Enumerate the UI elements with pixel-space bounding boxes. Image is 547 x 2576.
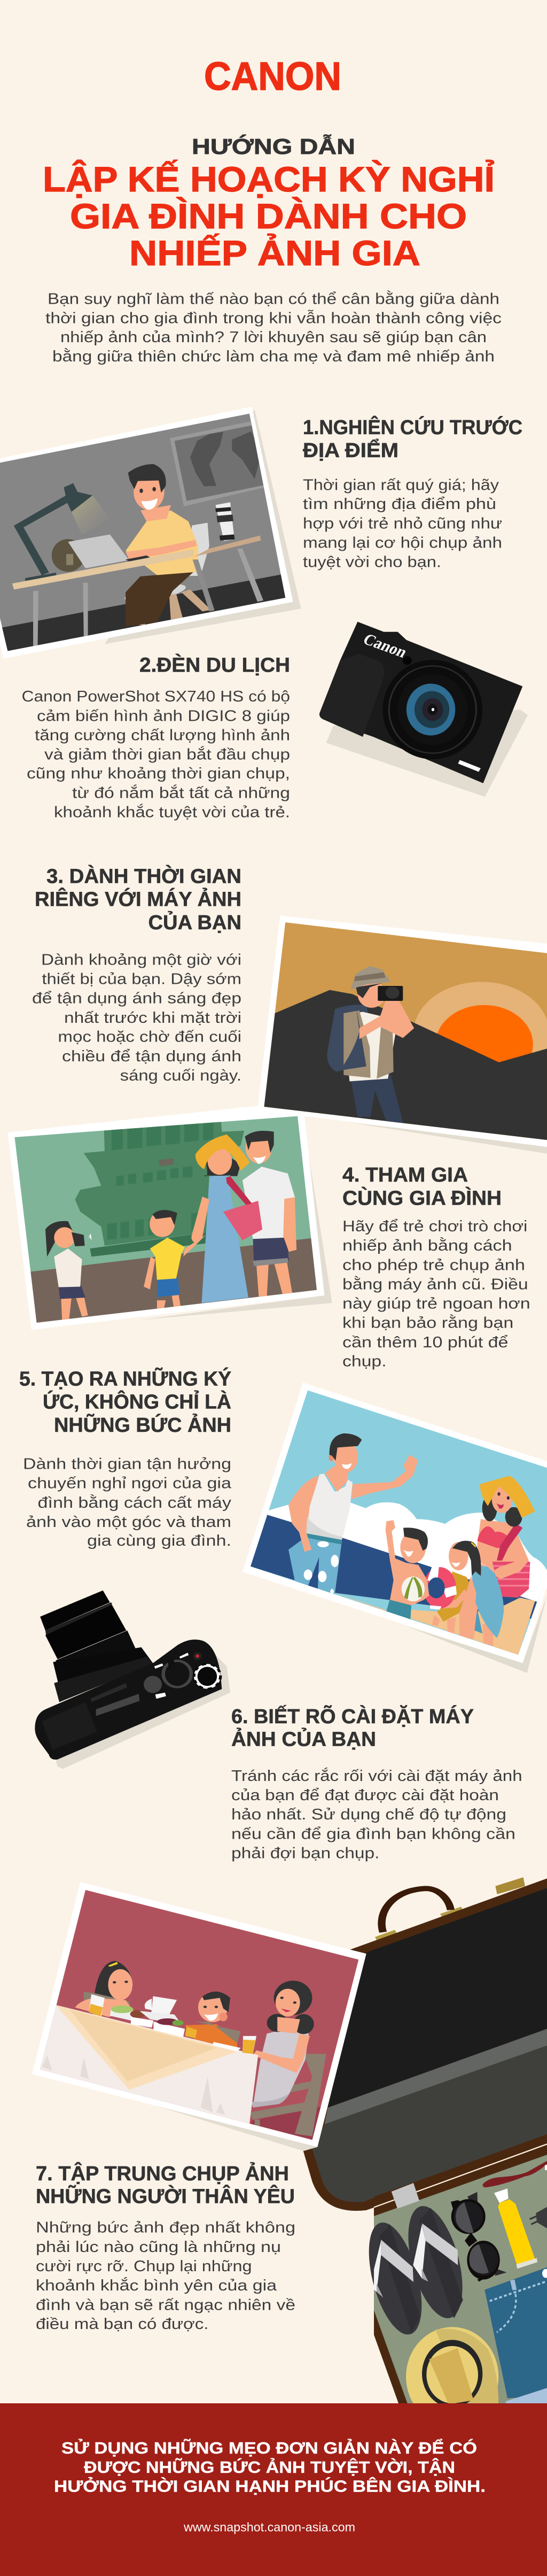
intro text: Bạn suy nghĩ làm thế nào bạn có thể cân bằng giữa dành	[48, 290, 499, 308]
body 3: sáng cuối ngày.	[120, 1067, 241, 1084]
body 6	[231, 1767, 522, 1862]
heading 2: 2.ĐÈN DU LỊCH	[139, 653, 290, 677]
suitcase contents	[358, 2134, 547, 2426]
body 3	[32, 952, 241, 1084]
body 4: Hãy để trẻ chơi trò chơi	[342, 1218, 527, 1235]
sunglasses	[467, 2192, 478, 2202]
body 6: nếu cần để gia đình bạn không cần	[231, 1825, 515, 1842]
woman	[204, 1158, 239, 1176]
heading 5: 5. TẠO RA NHỮNG KÝ	[19, 1367, 231, 1391]
body 7	[36, 2219, 295, 2333]
heading 4	[342, 1164, 502, 1209]
body 3: để tận dụng ánh sáng đẹp	[32, 990, 241, 1007]
body 7: điều mà bạn có được.	[36, 2316, 208, 2333]
footer message: SỬ DỤNG NHỮNG MẸO ĐƠN GIẢN NÀY ĐỂ CÓ	[61, 2438, 477, 2457]
body 3: mọc hoặc chờ đến cuối	[58, 1029, 241, 1046]
body 4: bằng máy ảnh cũ. Điều	[342, 1276, 528, 1293]
section 7 text	[36, 2162, 295, 2333]
body 4	[342, 1218, 530, 1370]
heading 3: 3. DÀNH THỜI GIAN	[46, 865, 241, 888]
section 2 text	[21, 653, 290, 821]
girl	[432, 1615, 440, 1626]
title	[43, 159, 495, 273]
heading 6	[231, 1705, 474, 1751]
suitcase lid	[302, 1877, 547, 2211]
woman	[253, 2027, 309, 2107]
heading 3: CỦA BẠN	[149, 911, 241, 934]
heading 7	[36, 2162, 295, 2208]
title: NHIẾP ẢNH GIA	[129, 233, 420, 273]
intro text: thời gian cho gia đình trong khi vẫn hoàn thành công việc	[45, 309, 502, 327]
body 4: cần thêm 10 phút để	[342, 1334, 509, 1351]
body 1: Thời gian rất quý giá; hãy	[303, 476, 499, 493]
body 2: và giảm thời gian bắt đầu chụp	[44, 745, 290, 763]
heading 7: 7. TẬP TRUNG CHỤP ẢNH	[36, 2162, 289, 2185]
title: GIA ĐÌNH DÀNH CHO	[70, 196, 467, 236]
heading 1: 1.NGHIÊN CỨU TRƯỚC	[303, 415, 522, 439]
body 2: Canon PowerShot SX740 HS có bộ	[21, 688, 290, 705]
heading 1	[303, 415, 522, 462]
sunscreen tube	[494, 2188, 509, 2203]
subtitle: HƯỚNG DẪN	[192, 134, 355, 159]
footer background	[0, 2403, 547, 2576]
footer message: HƯỞNG THỜI GIAN HẠNH PHÚC BÊN GIA ĐÌNH.	[54, 2476, 486, 2495]
footer panel	[0, 2403, 547, 2576]
heading 5: NHỮNG BỨC ẢNH	[54, 1413, 231, 1437]
body 5: gia cùng gia đình.	[87, 1532, 231, 1549]
body 5: đình bằng cách cất máy	[37, 1494, 232, 1511]
body 7: cười rực rỡ. Chụp lại những	[36, 2258, 252, 2275]
body 1: tìm những địa điểm phù	[303, 496, 496, 513]
table	[40, 2005, 258, 2124]
intro text	[45, 290, 502, 365]
hat	[406, 2327, 498, 2426]
heading 5	[19, 1367, 231, 1437]
header	[43, 54, 502, 365]
illustration: photo of family at temple	[0, 1101, 332, 1330]
section 6 text	[231, 1705, 522, 1862]
website url: www.snapshot.canon-asia.com	[183, 2520, 355, 2534]
illustration: photo of photographer at sunset	[257, 916, 547, 1154]
illustration: open suitcase	[302, 1877, 547, 2426]
body 2: cũng như khoảng thời gian chụp,	[27, 765, 290, 782]
body 5: ảnh vào một góc và tham	[26, 1514, 231, 1531]
body 2: từ đó nắm bắt tất cả những	[72, 784, 290, 801]
icon: Canon camera top view	[35, 1591, 230, 1769]
body 2: khoảnh khắc tuyệt vời của trẻ.	[54, 804, 290, 821]
title: LẬP KẾ HOẠCH KỲ NGHỈ	[43, 159, 495, 199]
body 2: cảm biến hình ảnh DIGIC 8 giúp	[37, 708, 290, 725]
body 7: đình và bạn sẽ rất ngạc nhiên về	[36, 2296, 295, 2313]
icon: Canon compact camera front	[319, 622, 528, 797]
body 3: thiết bị của bạn. Dậy sớm	[42, 970, 241, 988]
body 1	[303, 476, 502, 570]
heading 5: ỨC, KHÔNG CHỈ LÀ	[43, 1390, 231, 1414]
intro text: nhiếp ảnh của mình? 7 lời khuyên sau sẽ giúp bạn cân	[60, 329, 487, 346]
heading 6: 6. BIẾT RÕ CÀI ĐẶT MÁY	[231, 1705, 474, 1728]
heading 4: CÙNG GIA ĐÌNH	[342, 1186, 502, 1209]
body 1: mang lại cơ hội chụp ảnh	[303, 535, 502, 552]
illustration: photo of family at beach	[243, 1379, 547, 1673]
body 7: khoảnh khắc bình yên của gia	[36, 2277, 277, 2294]
body 6: của bạn để đạt được cài đặt hoàn	[231, 1787, 499, 1804]
section 1 text	[303, 415, 522, 570]
heading 1: ĐỊA ĐIỂM	[303, 438, 398, 462]
body 2: tăng cường chất lượng hình ảnh	[35, 727, 290, 744]
body 5: chuyến nghỉ ngơi của gia	[28, 1475, 232, 1492]
footer message	[54, 2438, 486, 2495]
girl	[94, 1961, 132, 1999]
heading 3: RIÊNG VỚI MÁY ẢNH	[35, 888, 241, 911]
heading 7: NHỮNG NGƯỜI THÂN YÊU	[36, 2185, 295, 2208]
body 4: khi bạn bảo rằng bạn	[342, 1314, 513, 1332]
section 5 text	[19, 1367, 232, 1549]
heading 4: 4. THAM GIA	[342, 1164, 468, 1186]
man	[288, 1537, 342, 1594]
charger	[536, 2207, 547, 2228]
boy	[386, 1599, 411, 1619]
body 5: Dành thời gian tận hưởng	[23, 1455, 231, 1472]
section 4 text	[342, 1164, 530, 1370]
body 6: phải đợi bạn chụp.	[231, 1845, 379, 1862]
flip flops	[358, 2215, 432, 2342]
body 6: Tránh các rắc rối với cài đặt máy ảnh	[231, 1767, 522, 1785]
body 4: cho phép trẻ chụp ảnh	[342, 1256, 525, 1274]
body 3: nhất trước khi mặt trời	[64, 1009, 241, 1027]
boy	[185, 2024, 237, 2048]
heading 3	[35, 865, 241, 934]
woman	[477, 1519, 529, 1571]
logo: Canon: CANON	[204, 54, 341, 98]
food	[89, 1994, 105, 2017]
body 7: phải lúc nào cũng là những nụ	[36, 2239, 281, 2256]
shorts	[485, 2268, 547, 2398]
boy	[157, 1300, 166, 1308]
heading 6: ẢNH CỦA BẠN	[231, 1727, 376, 1751]
girl	[61, 1298, 72, 1320]
body 4: nhiếp ảnh bằng cách	[342, 1237, 512, 1254]
body 4: chụp.	[342, 1353, 387, 1370]
man	[256, 1263, 269, 1298]
icon: Canon compact camera front: Canon	[360, 630, 410, 661]
illustration: photo of family dinner	[32, 1882, 366, 2151]
body 3: chiều để tận dụng ánh	[62, 1048, 241, 1065]
intro text: bằng giữa thiên chức làm cha mẹ và đam mê nhiếp ảnh	[52, 348, 495, 365]
body 5	[23, 1455, 232, 1549]
footer message: ĐƯỢC NHỮNG BỨC ẢNH TUYỆT VỜI, TẬN	[84, 2457, 455, 2477]
body 1: tuyệt vời cho bạn.	[303, 553, 441, 570]
chair	[295, 2054, 326, 2137]
body 3: Dành khoảng một giờ với	[41, 952, 241, 969]
body 7: Những bức ảnh đẹp nhất không	[36, 2219, 295, 2236]
body 4: này giúp trẻ ngoan hơn	[342, 1295, 530, 1312]
section 3 text	[32, 865, 241, 1084]
body 6: hảo nhất. Sử dụng chế độ tự động	[231, 1806, 506, 1823]
illustration: photo of man researching at desk	[0, 407, 301, 659]
body 1: hợp với trẻ nhỏ cũng như	[303, 515, 502, 532]
body 2	[21, 688, 290, 821]
